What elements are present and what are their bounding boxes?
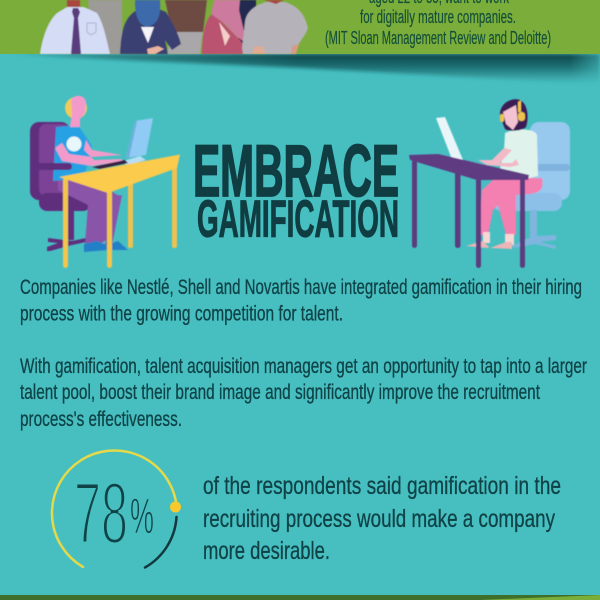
monitor <box>120 118 153 165</box>
heading: embrace: EMBRACE <box>193 131 399 212</box>
chair armrest <box>30 163 72 170</box>
paragraph 2 line 3: process's effectiveness. <box>20 408 182 431</box>
person: man in shirt and tie <box>40 0 110 54</box>
white monitor <box>436 117 465 166</box>
person: dark navy behind <box>235 0 256 54</box>
top shadow wedge <box>10 54 600 84</box>
bottom green strip <box>0 595 600 600</box>
body paragraph 2 <box>20 355 587 431</box>
left illustration: man at yellow desk <box>30 96 180 268</box>
man's head <box>65 96 87 127</box>
top stat text <box>325 0 551 48</box>
gauge arc yellow <box>52 451 177 567</box>
person: brown top and grey trousers <box>165 0 207 54</box>
keyboard <box>92 160 128 169</box>
gauge description <box>203 472 561 565</box>
woman's socks and shoes <box>466 232 514 249</box>
woman's arm <box>478 148 519 167</box>
person: woman in pink hijab <box>202 0 250 54</box>
heading: gamification: GAMIFICATION <box>197 190 399 248</box>
white keyboard <box>462 160 496 168</box>
chair <box>30 122 91 251</box>
woman's head with headphones <box>500 99 528 131</box>
right illustration: woman at purple desk <box>409 99 570 268</box>
top green banner <box>0 0 600 54</box>
person: man in grey sweatshirt <box>242 0 308 54</box>
yellow desk <box>59 154 180 268</box>
person: grey suit behind <box>88 0 122 54</box>
light blue chair <box>493 122 570 249</box>
gauge value: 78 <box>74 465 128 562</box>
gauge percent sign: % <box>130 488 154 544</box>
man's arms <box>55 140 122 166</box>
main heading <box>193 131 399 248</box>
body paragraph 1 <box>20 276 582 326</box>
man's legs <box>58 180 122 245</box>
woman's legs <box>479 178 542 235</box>
shirt logo <box>66 136 82 152</box>
man's shirt <box>53 125 92 181</box>
purple desk <box>409 154 529 268</box>
man's shoes <box>84 241 128 252</box>
person: woman in blue hijab and navy blazer <box>120 0 181 54</box>
description line 3: more desirable. <box>203 537 330 565</box>
woman's sweater <box>498 129 538 178</box>
gauge arc dark <box>145 517 176 568</box>
78 percent gauge <box>52 451 181 568</box>
people illustration <box>40 0 308 54</box>
stat line 2: for digitally mature companies. <box>360 7 516 27</box>
gauge dot <box>170 502 181 512</box>
paragraph 1 line 2: process with the growing competition for talent. <box>20 302 343 326</box>
